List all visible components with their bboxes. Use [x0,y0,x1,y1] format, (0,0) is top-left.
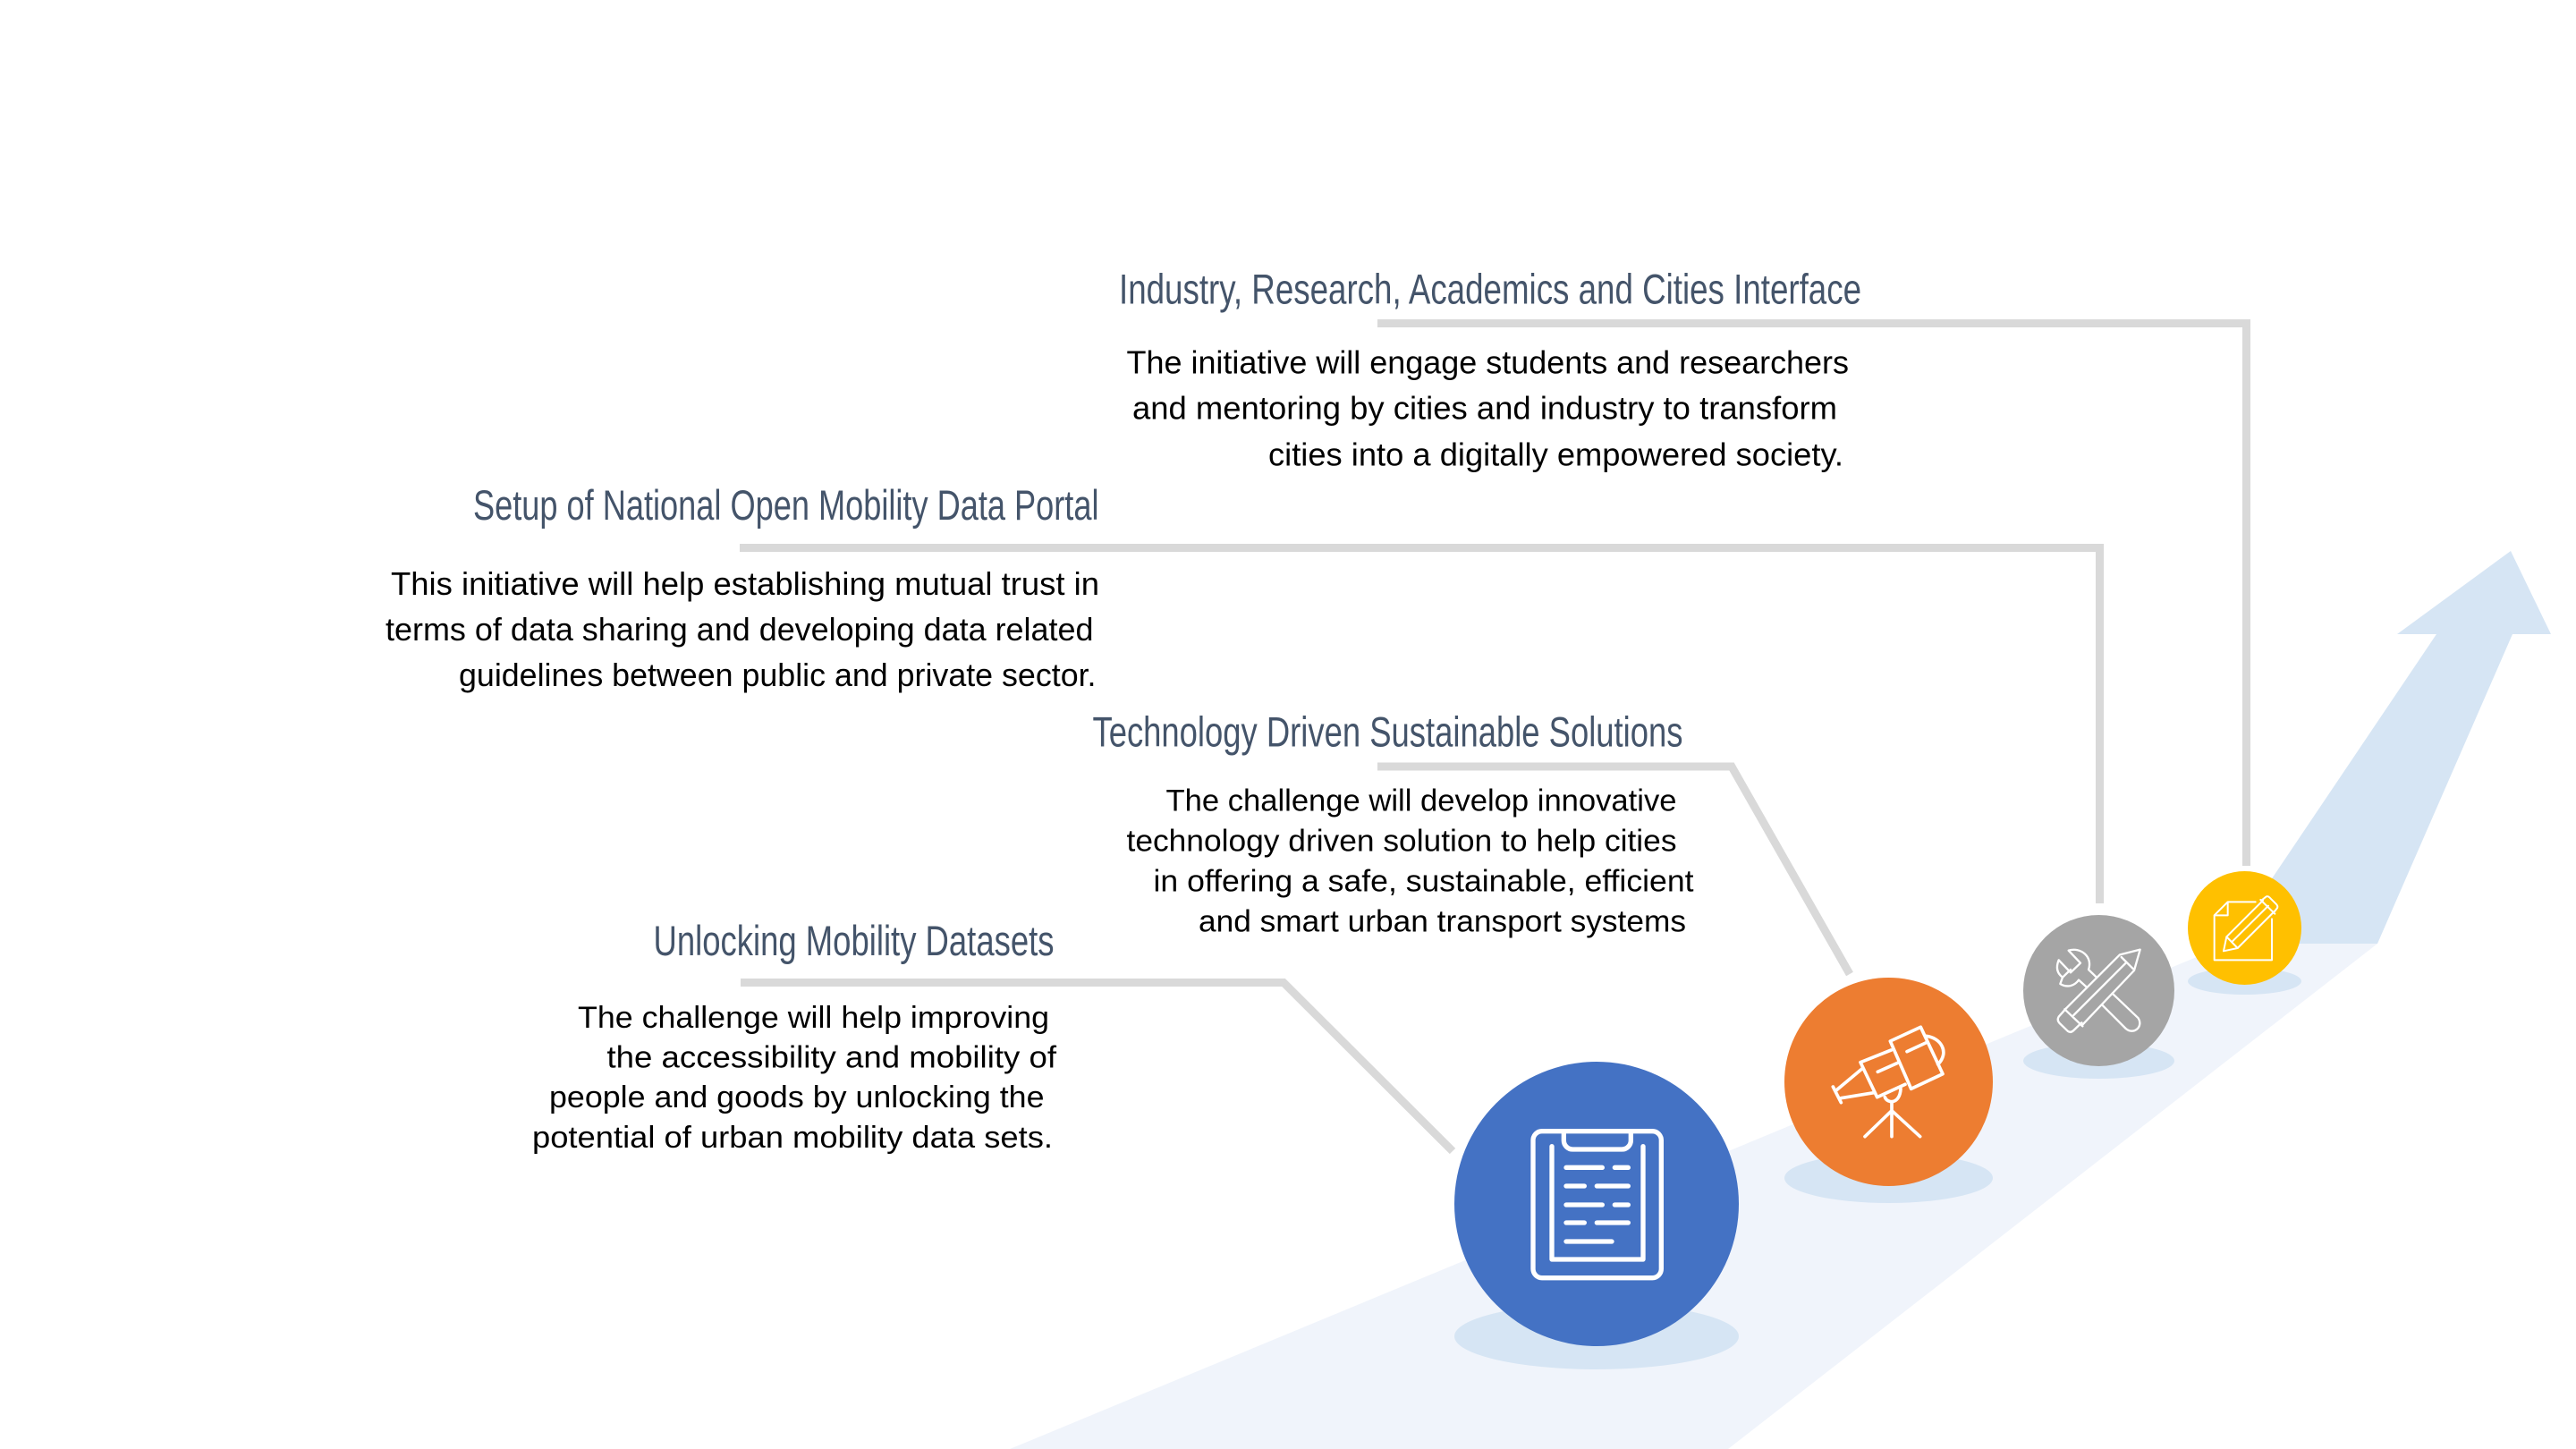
body: open data portal: guidelines between public and private sector. [459,657,1097,693]
circle: gray [2023,915,2174,1066]
circle: blue [1454,1062,1739,1346]
body: technology solutions [1127,784,1694,939]
step: unlocking mobility datasets circle [1454,1062,1739,1369]
step: industry interface circle [2188,871,2301,995]
icon: clipboard [1533,1131,1661,1278]
heading: unlocking datasets: Unlocking Mobility Datasets [653,917,1054,964]
body: technology solutions: technology driven solution to help cities [1127,825,1676,859]
shadow: blue circle [1454,1303,1739,1369]
text block: open data portal [386,481,1099,693]
body: unlocking datasets: people and goods by unlocking the [549,1080,1045,1114]
connector: unlocking datasets [741,982,1453,1151]
body: technology solutions: The challenge will develop innovative [1166,784,1676,818]
circle: yellow [2188,871,2301,985]
icon: note and pencil [2215,896,2277,960]
heading: open data portal: Setup of National Open Mobility Data Portal [473,481,1098,529]
body: open data portal [386,565,1099,693]
text block: technology solutions [1093,708,1694,939]
body: unlocking datasets: the accessibility and mobility of [606,1041,1057,1075]
body: industry interface: The initiative will engage students and researchers [1127,343,1849,381]
road [1010,944,2377,1449]
body: industry interface: and mentoring by cities and industry to transform [1132,390,1837,426]
body: industry interface: cities into a digitally empowered society. [1268,436,1843,472]
shadow: orange circle [1784,1153,1993,1203]
body: technology solutions: in offering a safe, sustainable, efficient [1154,864,1694,898]
icon: wrench and pencil [2057,950,2140,1032]
body: industry interface [1127,343,1849,472]
connector: industry interface [1377,324,2247,866]
shadow: yellow circle [2188,968,2301,995]
text block: unlocking datasets [532,917,1057,1155]
body: unlocking datasets: potential of urban mobility data sets. [532,1121,1053,1155]
arrow [2228,551,2551,944]
connector: technology solutions [1377,767,1850,974]
body: open data portal: This initiative will help establishing mutual trust in [391,565,1099,602]
body: open data portal: terms of data sharing and developing data related [386,611,1093,648]
circle: orange [1784,978,1993,1186]
body: unlocking datasets: The challenge will help improving [578,1001,1049,1035]
heading: technology solutions: Technology Driven Sustainable Solutions [1093,708,1683,755]
connector: open data portal [740,547,2100,903]
shadow: gray circle [2023,1043,2174,1079]
icon: telescope [1833,1027,1944,1137]
body: technology solutions: and smart urban transport systems [1199,905,1686,939]
heading: industry interface: Industry, Research, Academics and Cities Interface [1119,265,1861,313]
text block: industry interface [1119,265,1861,472]
step: technology circle [1784,978,1993,1203]
step: data portal circle [2023,915,2174,1079]
body: unlocking datasets [532,1001,1057,1155]
